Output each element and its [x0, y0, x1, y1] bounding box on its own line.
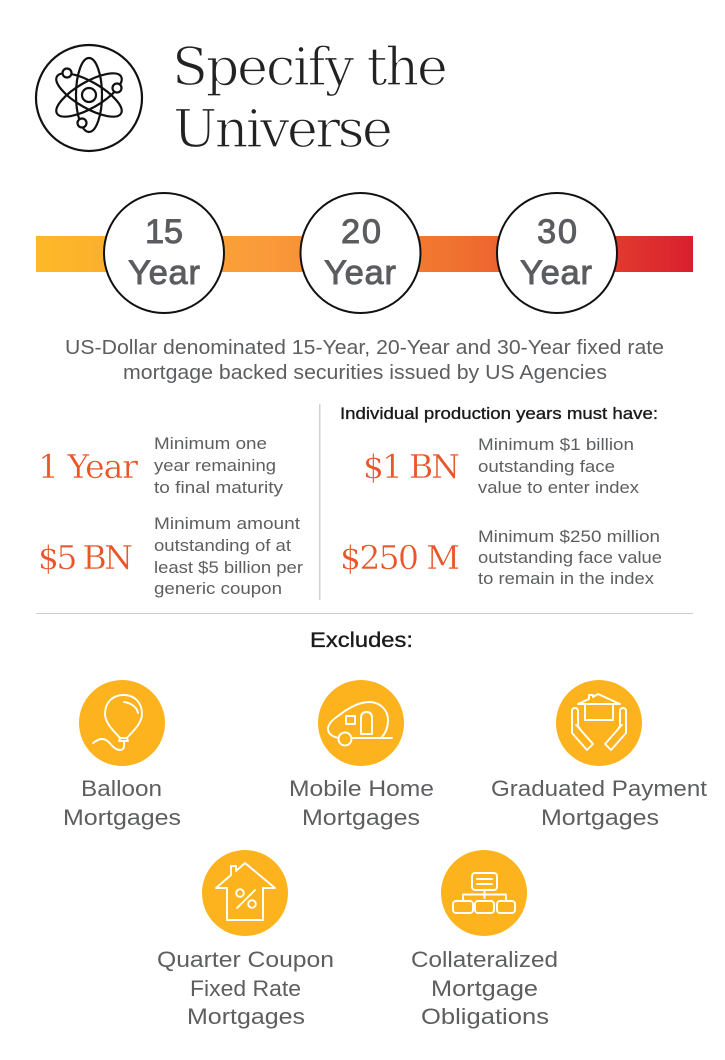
exclusion: collateralized mortgage obligations [411, 850, 558, 1029]
criterion: 1 year: 1 Year [38, 447, 138, 486]
description text: mortgage backed securities issued by US Agencies [123, 362, 607, 384]
icon: hands holding house [572, 694, 626, 750]
exclusion: quarter coupon fixed rate mortgages: Mortgages [187, 1004, 305, 1029]
criterion: 250 million: outstanding face value [478, 548, 662, 567]
criterion: 1 billion: Minimum $1 billion [478, 435, 634, 454]
criterion: 250 million: to remain in the index [478, 569, 655, 588]
title: Universe [173, 99, 393, 160]
criterion: 1 year: to final maturity [154, 478, 284, 497]
exclusion: balloon mortgages [63, 680, 181, 830]
exclusion: balloon mortgages: Mortgages [63, 805, 181, 830]
term: 20 year: 20 [341, 213, 381, 251]
exclusion: graduated payment mortgages: Mortgages [541, 805, 659, 830]
criterion: 5 billion: outstanding of at [154, 536, 291, 555]
criterion: 1 billion: $1 BN [363, 447, 460, 486]
criterion: 5 billion [38, 514, 303, 598]
term: 20 year [300, 193, 420, 313]
criterion: 1 billion: value to enter index [478, 478, 640, 497]
excludes heading: Excludes: [310, 629, 413, 652]
exclusion: graduated payment mortgages [491, 680, 707, 830]
description text: US-Dollar denominated 15-Year, 20-Year and 30-Year fixed rate [65, 337, 664, 359]
criterion: 1 billion: outstanding face [478, 457, 615, 476]
term: 15 year [104, 193, 224, 313]
icon: trailer [328, 702, 392, 746]
icon: house with percent [216, 863, 275, 920]
production years heading: Individual production years must have: [340, 404, 658, 423]
criterion: 5 billion: least $5 billion per [154, 558, 303, 577]
term: 30 year: Year [520, 254, 592, 292]
exclusion: graduated payment mortgages: Graduated Payment [491, 776, 707, 801]
term: 15 year: 15 [145, 213, 183, 251]
criterion: 5 billion: Minimum amount [154, 514, 300, 533]
exclusion: collateralized mortgage obligations: Collateralized [411, 947, 558, 972]
exclusion: mobile home mortgages: Mortgages [302, 805, 420, 830]
criterion: 250 million: Minimum $250 million [478, 527, 660, 546]
icon: org chart [453, 873, 515, 913]
criterion: 1 year: Minimum one [154, 434, 267, 453]
icon: atom [36, 45, 142, 151]
criterion: 250 million [340, 527, 662, 588]
criterion: 1 billion [363, 435, 640, 497]
term timeline bar [36, 193, 693, 313]
criterion: 1 year: year remaining [154, 456, 276, 475]
description text [65, 337, 664, 384]
criterion: 250 million: $250 M [340, 538, 460, 577]
exclusion: collateralized mortgage obligations: Mortgage [431, 976, 538, 1001]
term: 20 year: Year [324, 254, 396, 292]
criterion: 5 billion: $5 BN [38, 538, 133, 577]
criterion: 5 billion: generic coupon [154, 579, 282, 598]
exclusion: quarter coupon fixed rate mortgages: Quarter Coupon [157, 947, 334, 972]
exclusion: collateralized mortgage obligations: Obligations [421, 1004, 549, 1029]
term: 30 year: 30 [537, 213, 577, 251]
exclusion: mobile home mortgages [289, 680, 434, 830]
exclusion: mobile home mortgages: Mobile Home [289, 776, 434, 801]
icon: balloon [93, 695, 142, 750]
title [172, 37, 448, 160]
term: 30 year [497, 193, 617, 313]
term: 15 year: Year [128, 254, 200, 292]
criterion: 1 year [38, 434, 284, 497]
exclusion: quarter coupon fixed rate mortgages: Fixed Rate [190, 976, 301, 1001]
exclusion: quarter coupon fixed rate mortgages [157, 850, 334, 1029]
title: Specify the [172, 37, 448, 98]
exclusion: balloon mortgages: Balloon [81, 776, 162, 801]
